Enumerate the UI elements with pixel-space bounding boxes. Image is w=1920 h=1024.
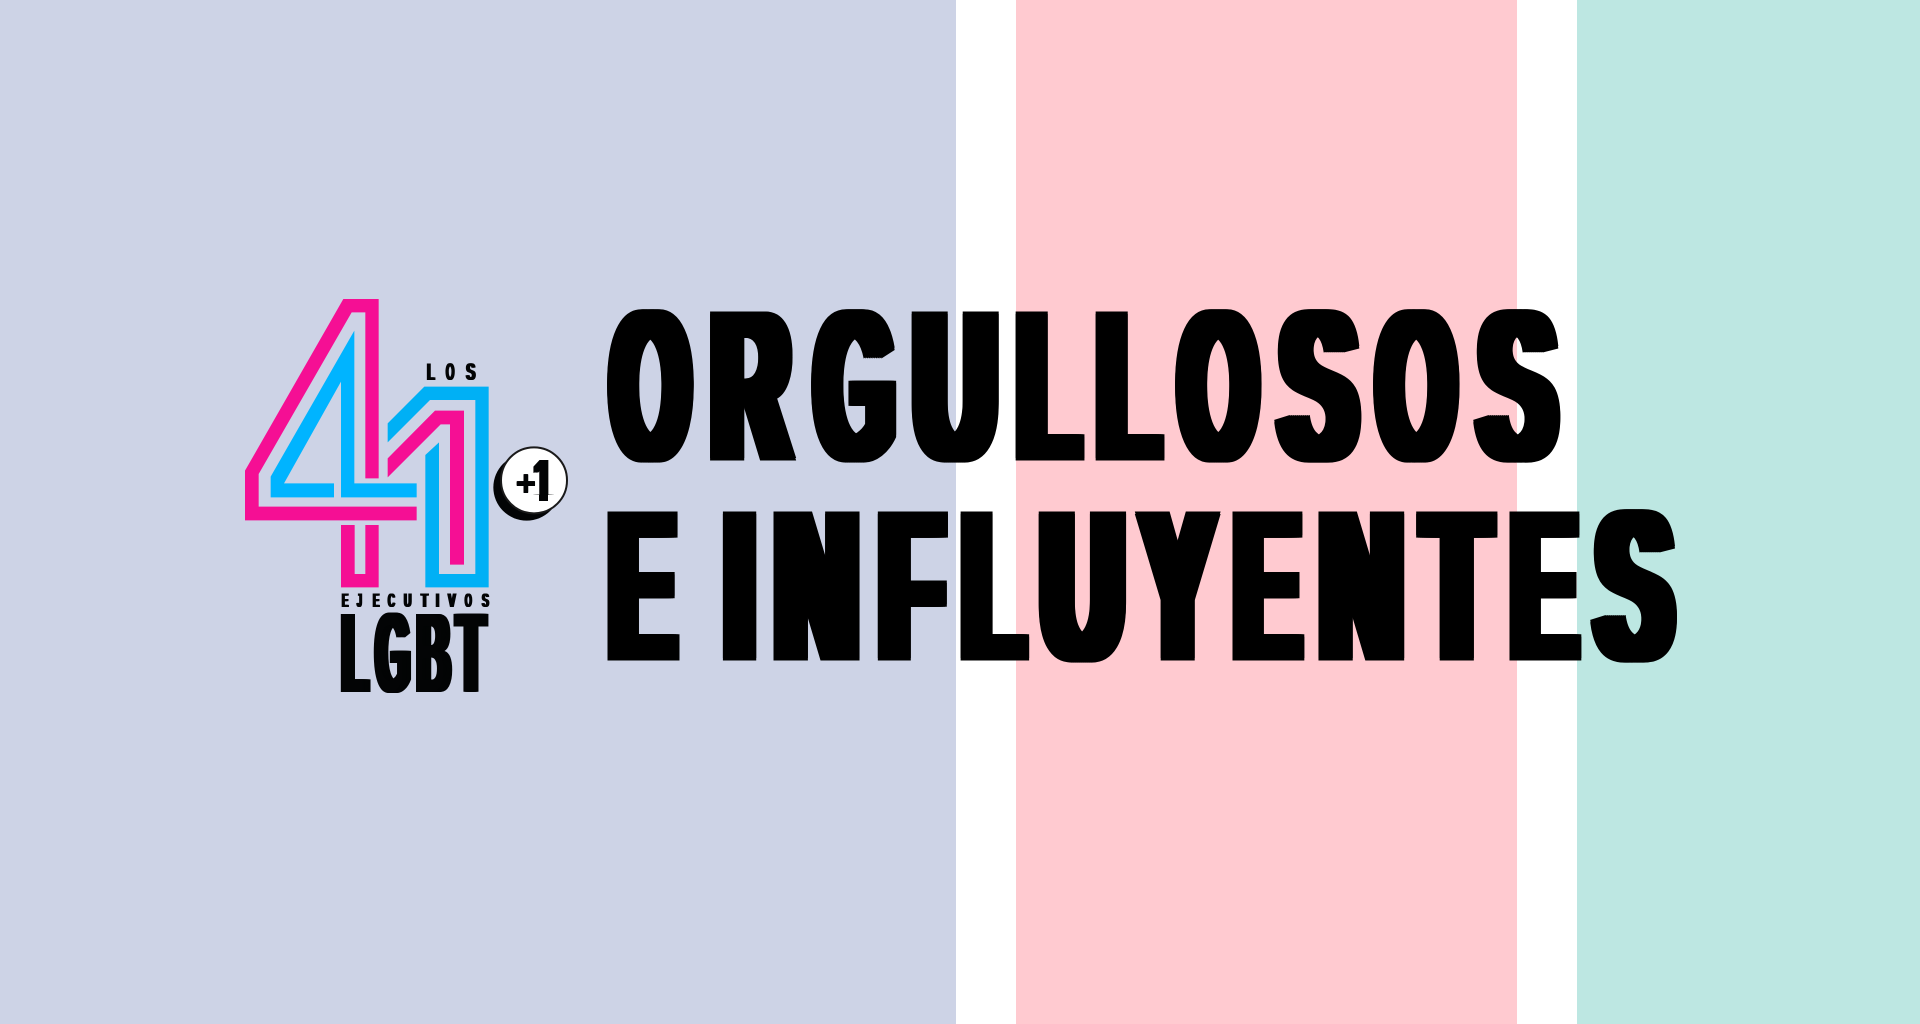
text: LOS: L <box>426 359 434 386</box>
heading: E INFLUYENTES: S <box>1587 466 1661 704</box>
panel: teal background band <box>1577 0 1920 1024</box>
heading: E INFLUYENTES: U <box>1032 466 1113 704</box>
text: LGBT: T <box>453 590 481 717</box>
panel: lavender background band <box>0 0 956 1024</box>
heading: ORGULLOSOS: L <box>1089 266 1150 504</box>
heading: ORGULLOSOS: O <box>603 266 680 504</box>
text: EJECUTIVOS: V <box>447 590 455 612</box>
heading: E INFLUYENTES <box>600 466 1677 704</box>
heading: ORGULLOSOS: L <box>1009 266 1070 504</box>
heading: E INFLUYENTES: I <box>716 466 744 704</box>
text: EJECUTIVOS: J <box>356 590 361 612</box>
text: EJECUTIVOS: U <box>403 590 411 612</box>
text: EJECUTIVOS: E <box>341 590 348 612</box>
text: +1 badge label: 1 <box>531 448 551 514</box>
heading: E INFLUYENTES: E <box>600 466 665 704</box>
heading: E INFLUYENTES: N <box>1310 466 1391 704</box>
heading: E INFLUYENTES: N <box>766 466 847 704</box>
text: EJECUTIVOS <box>341 590 490 612</box>
heading: ORGULLOSOS: R <box>703 266 779 504</box>
text: EJECUTIVOS: C <box>387 590 394 612</box>
heading: E INFLUYENTES: Y <box>1133 466 1204 704</box>
icon: interlaced 41 numerals with +1 badge <box>245 299 568 588</box>
text: LOS: O <box>445 359 453 386</box>
logo: Los 41 +1 Ejecutivos LGBT <box>245 299 568 717</box>
text: LOS <box>426 359 476 386</box>
text: EJECUTIVOS: S <box>481 590 487 612</box>
heading: E INFLUYENTES: L <box>954 466 1015 704</box>
text: LGBT: B <box>413 590 445 717</box>
text: EJECUTIVOS: T <box>420 590 426 612</box>
heading: ORGULLOSOS: O <box>1369 266 1446 504</box>
panel: pink background band <box>1016 0 1517 1024</box>
heading: ORGULLOSOS: O <box>1170 266 1248 504</box>
text: LGBT: G <box>372 590 405 717</box>
text: +1 badge label: + <box>515 464 536 503</box>
text: EJECUTIVOS: I <box>435 590 438 612</box>
text: +1 badge label <box>515 448 554 514</box>
heading: ORGULLOSOS: G <box>807 266 884 504</box>
text: LGBT <box>338 590 488 717</box>
heading: E INFLUYENTES: T <box>1415 466 1479 704</box>
heading: E INFLUYENTES: F <box>871 466 933 704</box>
heading: ORGULLOSOS <box>603 266 1676 663</box>
heading: E INFLUYENTES: E <box>1503 466 1568 704</box>
text: EJECUTIVOS: O <box>464 590 471 612</box>
heading: ORGULLOSOS: U <box>905 266 986 504</box>
text: LGBT: L <box>338 590 364 717</box>
heading: E INFLUYENTES: E <box>1226 466 1291 704</box>
text: EJECUTIVOS: E <box>372 590 378 612</box>
heading: ORGULLOSOS: S <box>1470 266 1545 504</box>
text: LOS: S <box>465 359 474 386</box>
heading: ORGULLOSOS: S <box>1271 266 1346 504</box>
